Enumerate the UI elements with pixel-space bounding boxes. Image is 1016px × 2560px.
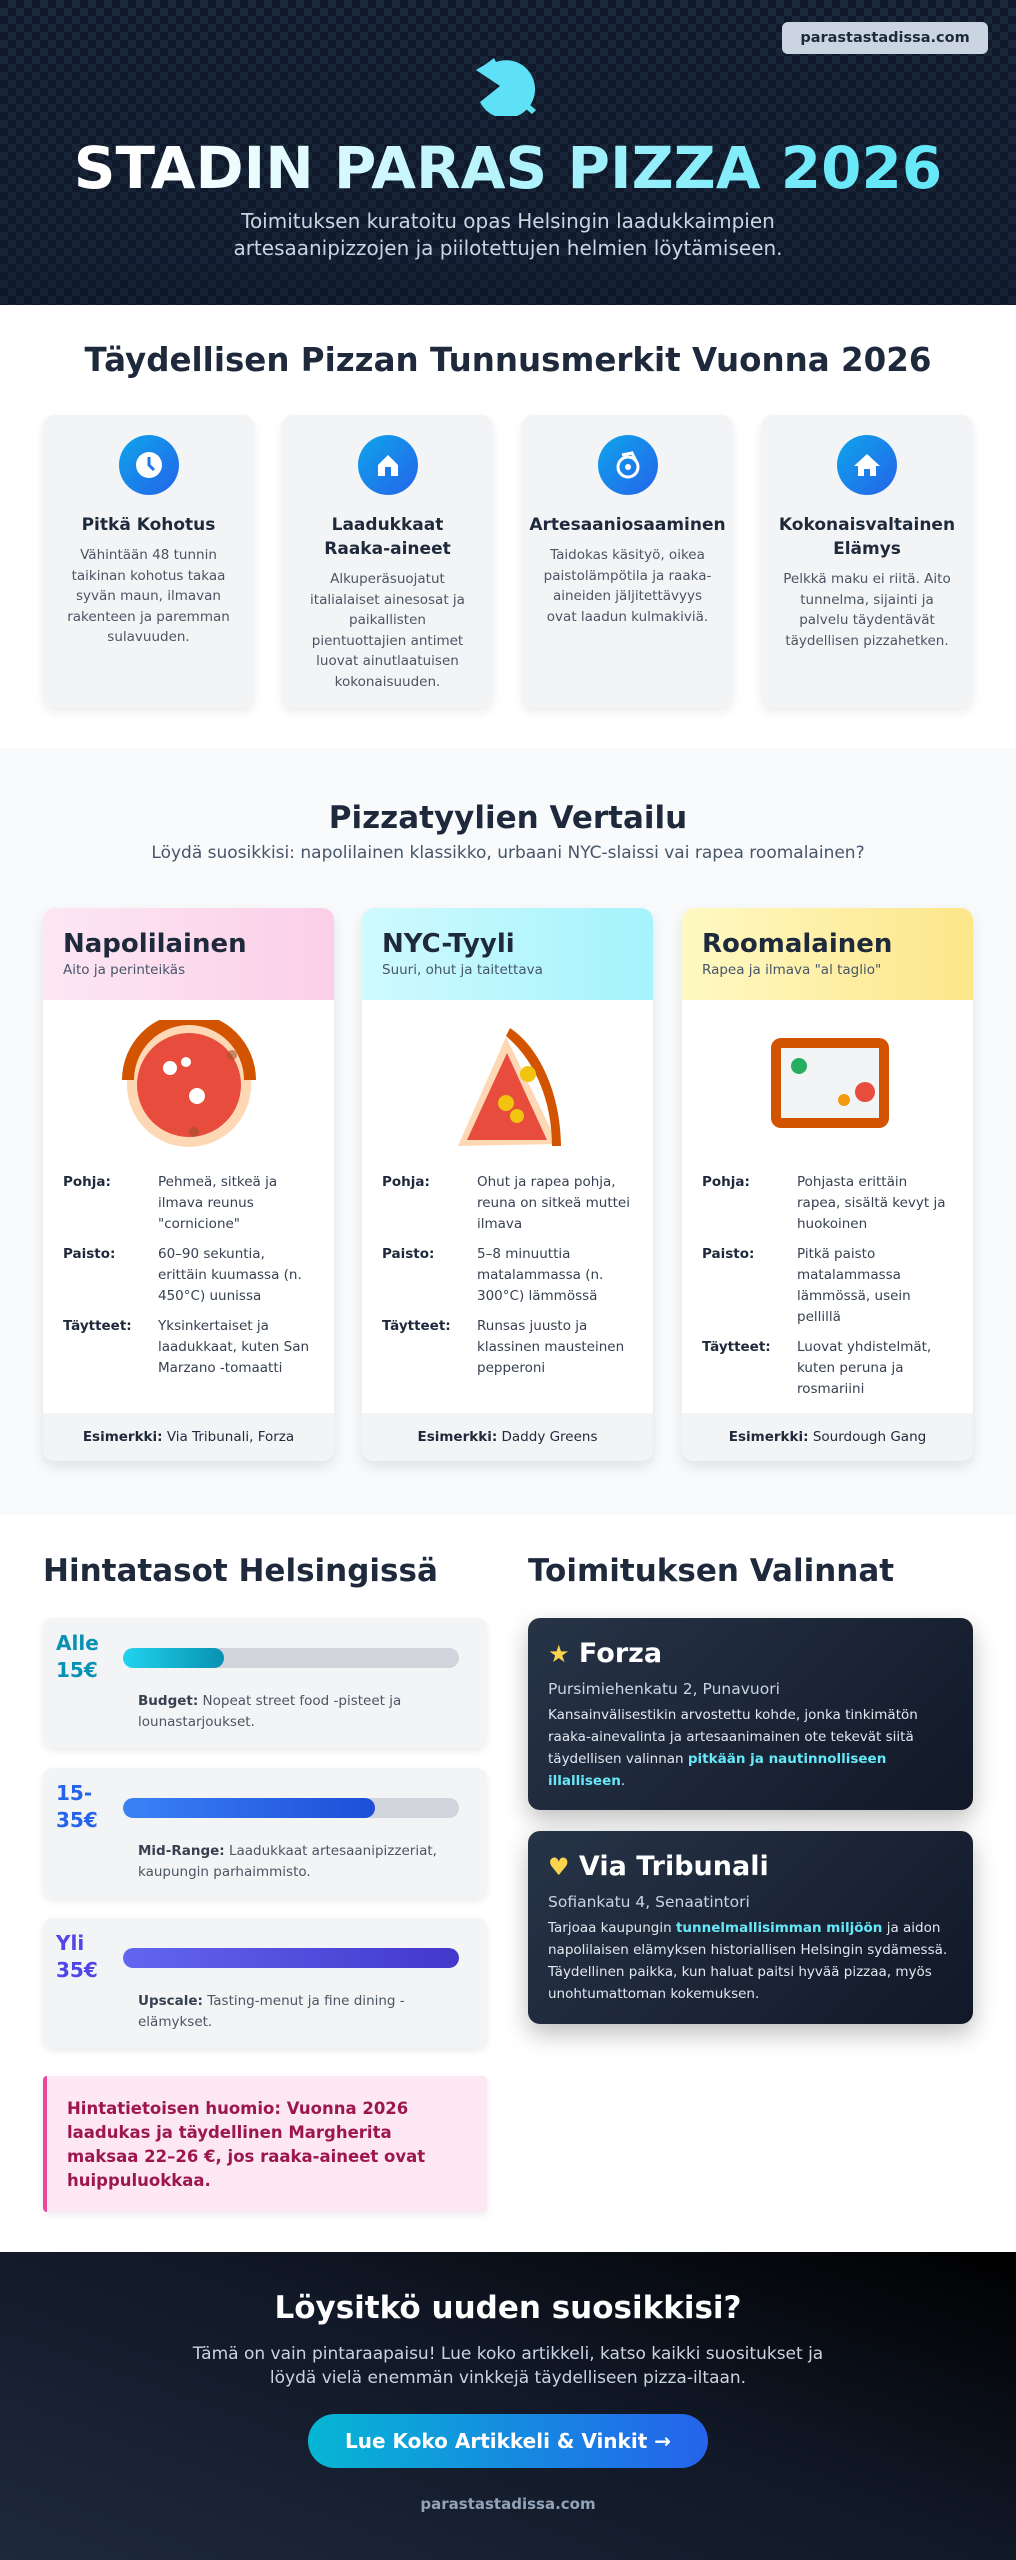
card: Laadukkaat Raaka-aineet: Laadukkaat	[332, 515, 443, 535]
section heading: hallmarks: Täydellisen Pizzan Tunnusmerkit Vuonna 2026	[85, 341, 931, 379]
card: Forza: Pursimiehenkatu 2, Punavuori	[548, 1680, 780, 1698]
card: NYC-Tyyli: Suuri, ohut ja taitettava	[382, 962, 543, 978]
card: Artesaaniosaaminen: Taidokas käsityö, oikea paistolämpötila ja raaka-aineiden jäljitettävyys ovat laadun kulmakiviä.	[544, 547, 711, 624]
price card: mid-range	[43, 1768, 487, 1898]
badge	[782, 22, 988, 54]
subtitle	[233, 209, 783, 260]
subtitle: Toimituksen kuratoitu opas Helsingin laadukkaimpien	[241, 209, 775, 233]
footer heading: Löysitkö uuden suosikkisi?	[274, 2290, 742, 2326]
card: Forza	[528, 1618, 973, 1810]
price card: mid-range: Mid-Range: Laadukkaat artesaanipizzeriat, kaupungin parhaimmisto.	[138, 1843, 437, 1880]
card: Kokonaisvaltainen Elämys: Elämys	[833, 539, 901, 559]
card: NYC-Tyyli: Pohja:	[382, 1174, 430, 1190]
price card: upscale	[43, 1918, 487, 2048]
card: Roomalainen: Pitkä paisto matalammassa lämmössä, usein pellillä	[797, 1246, 911, 1325]
card: Roomalainen: Roomalainen	[702, 929, 892, 959]
price card: upscale: Upscale: Tasting-menut ja fine dining -elämykset.	[138, 1993, 405, 2030]
footer text: Tämä on vain pintaraapaisu! Lue koko artikkeli, katso kaikki suositukset ja	[193, 2344, 823, 2364]
footer CTA	[0, 2252, 1016, 2560]
card: Napolilainen: Yksinkertaiset ja laadukkaat, kuten San Marzano -tomaatti	[158, 1318, 309, 1376]
card: Napolilainen: Esimerkki: Via Tribunali, Forza	[83, 1429, 294, 1445]
price card: budget: Budget: Nopeat street food -pisteet ja lounastarjoukset.	[138, 1693, 401, 1730]
card: Napolilainen: Täytteet:	[63, 1318, 132, 1334]
price card: upscale: Yli	[56, 1931, 84, 1955]
card: NYC-Tyyli: NYC-Tyyli	[382, 929, 515, 959]
card: Napolilainen: 60–90 sekuntia, erittäin kuumassa (n. 450°C) uunissa	[158, 1246, 302, 1304]
card: Roomalainen	[682, 908, 973, 1461]
card: Laadukkaat Raaka-aineet	[282, 415, 493, 708]
card: Pitkä Kohotus	[43, 415, 254, 708]
card: Pitkä Kohotus: Vähintään 48 tunnin taikinan kohotus takaa syvän maun, ilmavan rakenteen ja paremman sulavuuden.	[67, 547, 230, 645]
card: NYC-Tyyli: Paisto:	[382, 1246, 434, 1262]
card: Napolilainen: Pohja:	[63, 1174, 111, 1190]
title: STADIN PARAS PIZZA 2026	[74, 134, 942, 202]
callout: price note: Hintatietoisen huomio: Vuonna 2026 laadukas ja täydellinen Margherita maksaa 22–26 €, jos raaka-aineet ovat huippuluokkaa.	[67, 2099, 425, 2190]
callout: price note	[43, 2076, 487, 2212]
card: NYC-Tyyli: Täytteet:	[382, 1318, 451, 1334]
panel: feature cards	[42, 415, 974, 712]
price card: budget: Alle	[56, 1631, 99, 1655]
card: NYC-Tyyli: Runsas juusto ja klassinen mausteinen pepperoni	[477, 1318, 624, 1376]
button	[308, 2414, 708, 2468]
card: NYC-Tyyli: Esimerkki: Daddy Greens	[417, 1429, 598, 1445]
card: Via Tribunali: ♥ Via Tribunali	[548, 1851, 769, 1882]
card: Roomalainen: Paisto:	[702, 1246, 754, 1262]
card: Kokonaisvaltainen Elämys: Pelkkä maku ei riitä. Aito tunnelma, sijainti ja palvelu täydentävät täydellisen pizzahetken.	[783, 571, 951, 648]
panel: style cards	[40, 908, 976, 1470]
button: Lue Koko Artikkeli & Vinkit →	[345, 2429, 671, 2453]
heading: Pizzatyylien Vertailu	[329, 800, 687, 836]
card: Pitkä Kohotus: Pitkä Kohotus	[82, 515, 215, 535]
card: Roomalainen: Täytteet:	[702, 1339, 771, 1355]
section: styles comparison background	[0, 748, 1016, 1515]
footer url: parastastadissa.com	[420, 2495, 596, 2513]
card: Kokonaisvaltainen Elämys	[761, 415, 973, 708]
price card: budget: 15€	[56, 1658, 98, 1682]
heading: price levels: Hintatasot Helsingissä	[43, 1553, 438, 1589]
card: NYC-Tyyli	[362, 908, 653, 1461]
card: Roomalainen: Pohjasta erittäin rapea, sisältä kevyt ja huokoinen	[797, 1174, 945, 1232]
card: Forza: ★ Forza	[548, 1638, 662, 1669]
card: Via Tribunali: Sofiankatu 4, Senaatintori	[548, 1893, 750, 1911]
price card: mid-range: 15-	[56, 1781, 92, 1805]
footer text: löydä vielä enemmän vinkkejä täydelliseen pizza-iltaan.	[270, 2368, 746, 2388]
card: Napolilainen	[43, 908, 334, 1461]
card: Via Tribunali: Tarjoaa kaupungin tunnelmallisimman miljöön ja aidon napolilaisen elämyksen historiallisen Helsingin sydämessä. Täydellinen paikka, kun haluat paitsi hyvää pizzaa, myös unohtumattoman kokemuksen.	[548, 1920, 947, 2002]
card: Napolilainen: Pehmeä, sitkeä ja ilmava reunus "cornicione"	[158, 1174, 277, 1232]
card: Laadukkaat Raaka-aineet: Raaka-aineet	[324, 539, 451, 559]
card: Artesaaniosaaminen: Artesaaniosaaminen	[529, 515, 726, 535]
card: Forza: Kansainvälisestikin arvostettu kohde, jonka tinkimätön raaka-ainevalinta ja artesaanimainen ote tekevät siitä täydellisen valinnan pitkään ja nautinnolliseen illalliseen.	[548, 1707, 918, 1789]
icon: neapolitan pizza	[122, 1020, 256, 1147]
subtitle: artesaanipizzojen ja piilotettujen helmien löytämiseen.	[233, 236, 783, 260]
card: Artesaaniosaaminen	[522, 415, 733, 708]
icon: roman pizza tray	[771, 1038, 889, 1128]
price card: mid-range: 35€	[56, 1808, 98, 1832]
card: Napolilainen: Napolilainen	[63, 929, 247, 959]
card: NYC-Tyyli: Ohut ja rapea pohja, reuna on sitkeä muttei ilmava	[477, 1174, 630, 1232]
card: Napolilainen: Paisto:	[63, 1246, 115, 1262]
badge: parastastadissa.com	[800, 30, 970, 46]
card: Via Tribunali	[528, 1831, 973, 2024]
card: Laadukkaat Raaka-aineet: Alkuperäsuojatut italialaiset ainesosat ja paikallisten pientuottajien antimet luovat ainutlaatuisen kokonaisuuden.	[310, 571, 465, 690]
price card: upscale: 35€	[56, 1958, 98, 1982]
subtitle: Löydä suosikkisi: napolilainen klassikko, urbaani NYC-slaissi vai rapea roomalainen?	[151, 843, 865, 863]
card: Kokonaisvaltainen Elämys: Kokonaisvaltainen	[779, 515, 955, 535]
header	[0, 0, 1016, 305]
card: Roomalainen: Luovat yhdistelmät, kuten peruna ja rosmariini	[797, 1339, 931, 1397]
price card: budget	[43, 1618, 487, 1748]
heading: editors' picks: Toimituksen Valinnat	[528, 1553, 894, 1589]
card: Napolilainen: Aito ja perinteikäs	[63, 962, 185, 978]
card: Roomalainen: Rapea ja ilmava "al taglio"	[702, 962, 881, 978]
card: NYC-Tyyli: 5–8 minuuttia matalammassa (n. 300°C) lämmössä	[477, 1246, 603, 1304]
footer text	[192, 2344, 823, 2388]
logo icon	[476, 58, 536, 116]
card: Roomalainen: Pohja:	[702, 1174, 750, 1190]
card: Roomalainen: Esimerkki: Sourdough Gang	[729, 1429, 926, 1445]
icon: NYC slice	[458, 1028, 561, 1146]
